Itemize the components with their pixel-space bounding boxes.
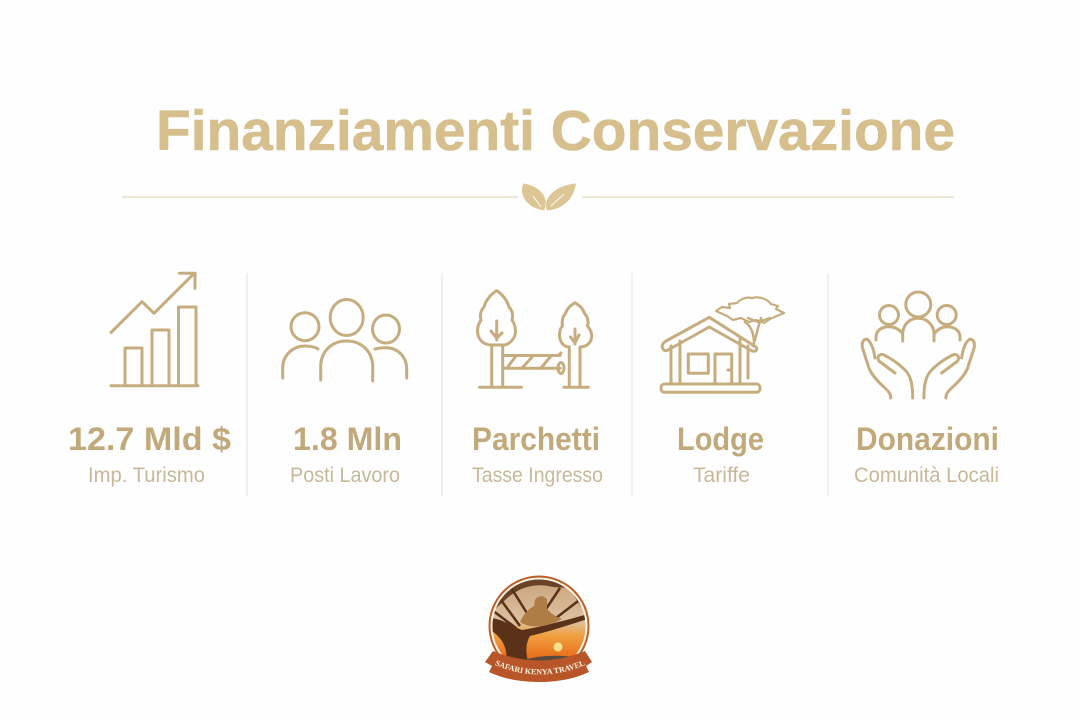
icon: hands holding community bbox=[862, 292, 974, 398]
label: Tasse Ingresso: Tasse Ingresso bbox=[472, 464, 603, 487]
value: 1.8 Mln: 1.8 Mln bbox=[293, 421, 402, 457]
label: Posti Lavoro: Posti Lavoro bbox=[290, 464, 400, 487]
leopard bbox=[520, 596, 562, 626]
logo: Safari Kenya Travel badge bbox=[485, 576, 592, 682]
icon: park gate with trees bbox=[478, 291, 592, 387]
icon: three people bbox=[283, 300, 407, 381]
panel: donations bbox=[854, 292, 999, 487]
icon: growth bar chart bbox=[111, 273, 198, 386]
panel: lodge rates bbox=[661, 297, 784, 487]
infographic canvas bbox=[70, 108, 998, 682]
panel: jobs bbox=[283, 300, 407, 487]
label: Imp. Turismo: Imp. Turismo bbox=[88, 464, 205, 487]
icon: leaves ornament bbox=[522, 184, 576, 210]
icon: lodge with acacia tree bbox=[661, 297, 784, 392]
trunk and main branch bbox=[492, 615, 585, 660]
value: 12.7 Mld $: 12.7 Mld $ bbox=[68, 421, 231, 457]
ribbon text: SAFARI KENYA TRAVEL bbox=[495, 660, 585, 674]
ribbon bbox=[485, 651, 592, 682]
value: Donazioni: Donazioni bbox=[856, 421, 999, 457]
value: Parchetti: Parchetti bbox=[472, 421, 600, 457]
title: Finanziamenti Conservazione bbox=[156, 99, 955, 163]
panel: tourism revenue bbox=[68, 273, 231, 487]
label: Tariffe: Tariffe bbox=[693, 464, 750, 487]
label: Comunità Locali: Comunità Locali bbox=[854, 464, 999, 487]
value: Lodge: Lodge bbox=[677, 421, 764, 457]
panel: park fees bbox=[472, 291, 603, 487]
canopy bbox=[496, 580, 566, 608]
distant trees bbox=[526, 656, 570, 660]
